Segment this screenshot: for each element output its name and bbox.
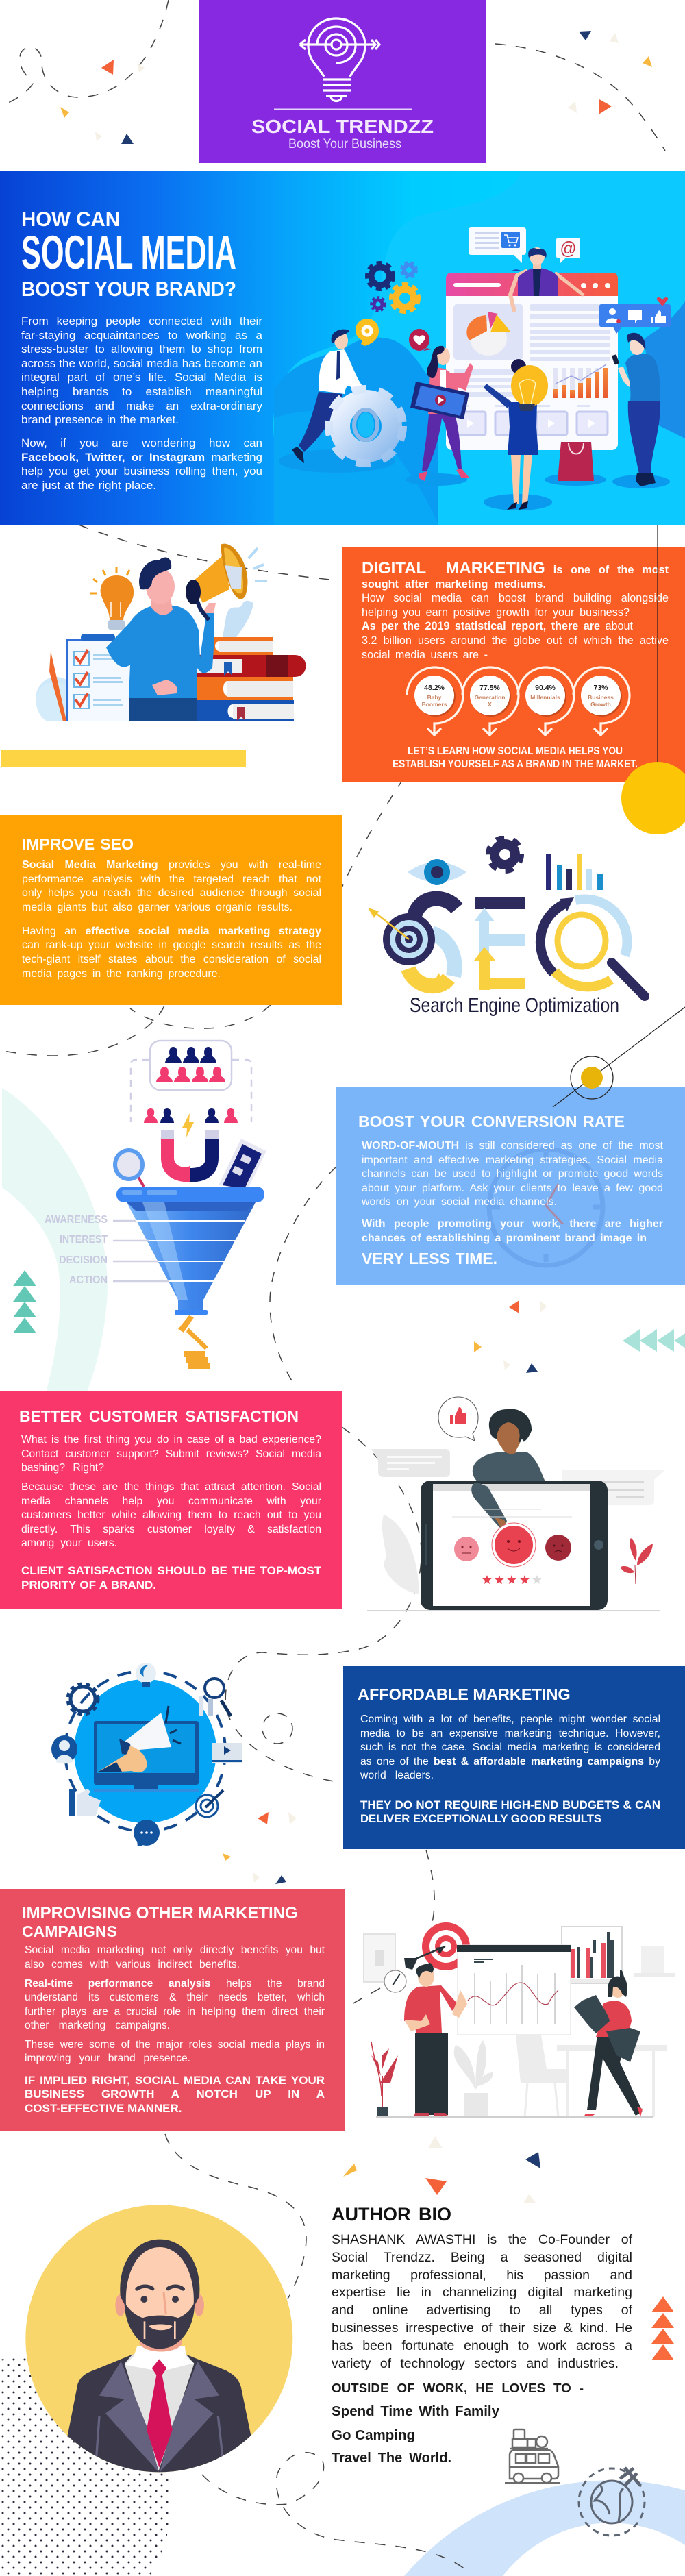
heading: how can social media boost your brand: BOOST YOUR BRAND?: [21, 278, 236, 301]
speech bubble: at sign: [556, 238, 580, 263]
heading: how can social media boost your brand: HOW CAN: [21, 208, 120, 231]
heading: how can social media boost your brand: [21, 208, 236, 301]
text block: affordable marketing body: DELIVER EXCEPTIONALLY GOOD RESULTS: [360, 1812, 601, 1825]
text block: digital marketing intro: As per the 2019 statistical report, there are about: [362, 620, 633, 632]
star rating: [482, 1573, 543, 1587]
icons: gears: [367, 262, 419, 312]
text block: author bio: [332, 2204, 633, 2466]
text block: seo body: Having an effective social media marketing strategy: [22, 926, 321, 937]
stat: business growth: 73%: [593, 684, 608, 692]
pale plant: [454, 2040, 493, 2116]
text block: author bio: and online advertising to all types of: [332, 2303, 632, 2318]
text block: word of mouth: VERY LESS TIME.: [362, 1250, 497, 1267]
panel: affordable marketing: [343, 1666, 685, 1849]
heading: how can social media boost your brand: SOCIAL MEDIA: [21, 226, 236, 279]
person: man on top of window: [510, 247, 584, 312]
star rating: ★: [494, 1573, 505, 1587]
panel: digital marketing: [342, 547, 685, 782]
funnel stage labels: ACTION: [69, 1274, 108, 1286]
icon: eye: [408, 859, 466, 885]
letter E: [474, 897, 525, 990]
funnel stage labels: DECISION: [59, 1254, 108, 1266]
person leaning on tablet: [473, 1409, 546, 1524]
text block: campaigns body: improving your brand presence.: [25, 2053, 190, 2064]
overlay: thin lines and accent circles: [552, 525, 685, 1107]
pale office furniture: [516, 1946, 675, 2117]
text block: word of mouth: important and effective marketing strategies. Social media: [362, 1154, 663, 1166]
text block: digital marketing intro: sought after marketing mediums.: [362, 578, 546, 591]
icon: gear: [488, 838, 521, 871]
text block: seo body: media giants but also garner various organic results.: [22, 902, 292, 913]
label: search engine optimization: Search Engine Optimization: [410, 994, 619, 1017]
illustration: SEO search engine optimization: [368, 836, 649, 1017]
star rating: ★: [482, 1573, 493, 1587]
text block: digital marketing intro: How social media can boost brand building alongside: [362, 592, 669, 604]
social reaction bubble: [599, 297, 671, 334]
heading: improvising other marketing campaigns: IMPROVISING OTHER MARKETING: [22, 1904, 298, 1922]
person: woman with tablet: [410, 346, 473, 481]
text block: hero introduction: connections and make an extra-ordinary: [21, 399, 262, 412]
icon: lightbulb: [136, 1663, 156, 1687]
funnel stage labels: AWARENESS: [45, 1214, 108, 1226]
illustration: team around a website: [279, 227, 671, 510]
attracted people: [144, 1108, 238, 1123]
text block: customer satisfaction body: Contact customer support? Submit reviews? Social media: [21, 1448, 321, 1459]
text block: seo body: Social Media Marketing provides you with real-time: [22, 859, 321, 871]
person: man with phone: [612, 333, 660, 486]
text block: author bio: businesses irrespective of their size & kind. He: [332, 2320, 632, 2336]
star rating: ★: [519, 1573, 530, 1587]
chart frame: [562, 1927, 622, 1983]
text block: hero introduction: [21, 314, 262, 492]
text block: digital marketing intro: social media users are -: [362, 649, 488, 661]
text block: hero introduction: across the world, social media has become an: [21, 357, 262, 370]
icon: lightbulb target logo: [300, 18, 379, 101]
stat: baby boomers: Baby: [427, 694, 442, 701]
text block: digital marketing intro: DIGITAL MARKETING is one of the most: [362, 559, 669, 578]
text block: affordable marketing body: such is not the case. Social media marketing is considered: [360, 1742, 660, 1753]
text block: affordable marketing body: THEY DO NOT REQUIRE HIGH-END BUDGETS & CAN: [360, 1798, 660, 1811]
illustration: digital marketing monitor hub: [51, 1663, 242, 1846]
brand name: SOCIAL TRENDZZ: [251, 116, 434, 137]
icon: thumbs up: [69, 1789, 101, 1816]
star rating: ★: [506, 1573, 517, 1587]
decorative yellow bar: [1, 750, 246, 767]
rating face: neutral: [454, 1537, 479, 1561]
text block: author bio: SHASHANK AWASTHI is the Co-Founder of: [332, 2232, 632, 2247]
accent: target circle: [571, 1056, 613, 1099]
watermark: clock: [486, 1147, 606, 1267]
text block: author bio: Social Trendzz. Being a seasoned digital: [332, 2250, 632, 2265]
text block: affordable marketing body: media to be an expensive marketing technique. However,: [360, 1728, 660, 1739]
text block: affordable marketing body: Coming with a lot of benefits, people might wonder social: [360, 1713, 660, 1725]
illustration: author portrait: [25, 2205, 293, 2472]
text block: hero introduction: brand presence in the market.: [21, 413, 179, 426]
icon: globe with plane: [578, 2466, 645, 2536]
icon: pale leaf: [382, 1515, 419, 1594]
books stack: [192, 637, 306, 721]
heading: author bio: AUTHOR BIO: [332, 2204, 451, 2225]
bubble: gray right: [562, 1470, 664, 1505]
text block: digital marketing intro: [362, 559, 669, 661]
icon: camper van: [505, 2428, 560, 2484]
stat: baby boomers: [414, 676, 456, 717]
stat: generation x: 77.5%: [480, 684, 501, 692]
text block: campaigns body: other marketing campaigns.: [25, 2020, 170, 2031]
text block: author bio: variety of technology sectors and industries.: [332, 2356, 619, 2371]
tagline: Boost Your Business: [288, 137, 401, 151]
text block: campaigns body: COST-EFFECTIVE MANNER.: [25, 2102, 182, 2115]
text block: campaigns body: also comes with various indirect benefits.: [25, 1959, 240, 1970]
panel: better customer satisfaction: [0, 1391, 342, 1609]
text block: word of mouth: With people promoting your work, there are higher: [362, 1218, 663, 1230]
text block: digital marketing intro: helping you earn positive growth for your business?: [362, 606, 630, 619]
heading: boost your conversion rate: BOOST YOUR CONVERSION RATE: [358, 1113, 625, 1130]
heading: improvising other marketing campaigns: [22, 1904, 298, 1940]
text block: customer satisfaction body: What is the first thing you do in case of a bad experience?: [21, 1434, 321, 1446]
text block: hero introduction: help you get your business rolling then, you: [21, 465, 262, 478]
text block: customer satisfaction body: PRIORITY OF A BRAND.: [21, 1578, 156, 1591]
heading: affordable marketing: AFFORDABLE MARKETING: [358, 1685, 571, 1703]
funnel: [116, 1187, 264, 1315]
text block: hero introduction: integral part of one’s life. Social Media is: [21, 371, 262, 384]
text block: seo body: can rank-up your website in google search results as the: [22, 939, 321, 951]
person: presenter: [404, 1963, 467, 2117]
pale frame left: [364, 1934, 395, 1982]
text block: digital marketing intro: 3.2 billion users around the globe out of which the active: [362, 634, 669, 647]
text block: campaigns body: These were some of the major roles social media plays in: [25, 2039, 325, 2051]
bar chart: [553, 364, 608, 398]
text block: author bio: OUTSIDE OF WORK, HE LOVES TO -: [332, 2381, 584, 2395]
illustration: presenter with target and chart: [363, 1922, 675, 2118]
statistics rings: [406, 666, 631, 737]
icon: magnifier: [199, 1679, 231, 1716]
text block: seo body: media pages in the ranking procedure.: [22, 968, 221, 980]
speech bubble: cart: [469, 227, 526, 263]
icon: shopping bag: [558, 442, 594, 481]
heading: better customer satisfaction: BETTER CUSTOMER SATISFACTION: [19, 1407, 299, 1425]
person: woman holding dog: [574, 1970, 643, 2117]
person: [106, 558, 216, 721]
text block: seo body: tech-giant itself states about the consideration of social: [22, 954, 321, 965]
stat: baby boomers: Boomers: [422, 701, 447, 708]
text block: customer satisfaction body: directly. This sparks customer loyalty & satisfaction: [21, 1524, 321, 1535]
text block: campaigns body: IF IMPLIED RIGHT, SOCIAL MEDIA CAN TAKE YOUR: [25, 2074, 325, 2087]
icon: magnet: [161, 1130, 219, 1182]
text block: campaigns body: [25, 1944, 325, 2115]
stat: business growth: Growth: [590, 701, 611, 708]
rating face: happy: [492, 1523, 536, 1567]
text block: customer satisfaction body: CLIENT SATISFACTION SHOULD BE THE TOP-MOST: [21, 1564, 321, 1577]
text block: author bio: has been fortunate enough to work across a: [332, 2338, 632, 2353]
icon: chat bubble: [134, 1820, 160, 1847]
text block: word of mouth: channels can be used to highlight or promote good words: [362, 1168, 663, 1180]
text block: hero introduction: stress-buster to allowing them to shop from: [21, 343, 262, 356]
icon: magnifier: [115, 1150, 144, 1187]
stat: generation x: X: [488, 701, 492, 708]
text block: hero introduction: Facebook, Twitter, or Instagram marketing: [21, 451, 262, 464]
text block: affordable marketing body: as one of the best & affordable marketing campaigns by: [360, 1755, 660, 1768]
bubble: heart: [409, 329, 432, 351]
text block: hero introduction: far-staying acquaintances to working as a: [21, 329, 262, 342]
tablet with rating faces: [421, 1481, 608, 1610]
accent: yellow circle: [621, 762, 685, 834]
text block: author bio: expertise lie in channelizing digital marketing: [332, 2285, 632, 2300]
panel: improvising other marketing campaigns: [0, 1889, 345, 2131]
funnel stage labels: INTEREST: [60, 1234, 108, 1246]
website window: [446, 273, 618, 450]
person: woman with lightbulb: [484, 359, 548, 510]
funnel stage labels: [45, 1214, 169, 1286]
icon: megaphone: [186, 544, 267, 620]
icon: red plant: [621, 1538, 653, 1584]
illustration: marketing funnel with magnet: [45, 1040, 266, 1369]
callout: learn how social media helps: [393, 745, 638, 770]
text block: campaigns body: Social media marketing not only directly benefits you but: [25, 1944, 325, 1956]
bubble: thumbs up: [438, 1397, 478, 1441]
text block: word of mouth: about your platform. Ask your clients to leave a few good: [362, 1182, 663, 1194]
text block: hero introduction: Now, if you are wondering how can: [21, 436, 262, 449]
text block: customer satisfaction body: customers better while allowing them to reach out to you: [21, 1509, 321, 1521]
text block: customer satisfaction body: media channels help you communicate with your: [21, 1495, 321, 1507]
logo panel: Social Trendzz: [199, 0, 486, 163]
text block: affordable marketing body: [360, 1713, 660, 1825]
icon: leaves: [223, 601, 253, 637]
bubble: orange gear: [356, 319, 379, 346]
monitor with megaphone: [94, 1706, 199, 1792]
text block: seo body: [22, 859, 321, 980]
speech bubble: at sign: @: [560, 238, 577, 258]
stat: baby boomers: 48.2%: [424, 684, 445, 692]
callout: learn how social media helps: LET’S LEARN HOW SOCIAL MEDIA HELPS YOU: [408, 745, 623, 757]
text block: word of mouth: [362, 1140, 663, 1267]
text block: author bio: Spend Time With Family: [332, 2403, 499, 2419]
icon: target: [196, 1790, 223, 1817]
coins falling: [178, 1315, 210, 1369]
icon: lightbulb: [90, 567, 134, 630]
text block: campaigns body: understand its customers & their needs better, which: [25, 1992, 325, 2003]
panel: improve seo: [0, 815, 342, 1005]
text block: seo body: performance analysis with the targeted reach that not: [22, 874, 321, 885]
letter Q magnifier: [540, 900, 645, 996]
text block: seo body: only helps you reach the desired audience through social: [22, 887, 321, 899]
audience box: [131, 1041, 251, 1122]
text block: campaigns body: Real-time performance analysis helps the brand: [25, 1978, 325, 1990]
icon: phone: [219, 1139, 266, 1189]
stat: millennials: [525, 676, 566, 717]
icon: red plant and pot: [371, 2042, 398, 2117]
panel: boost your conversion rate: [336, 1087, 685, 1285]
text block: author bio: marketing professional, his passion and: [332, 2268, 632, 2283]
bubble: arrow: [384, 1970, 406, 1992]
icon: lightning bolt: [182, 1113, 194, 1137]
letter S: [408, 899, 457, 986]
text block: hero introduction: From keeping people connected with their: [21, 314, 262, 327]
panel: hero how can social media boost your brand: [0, 171, 685, 525]
stat: millennials: 90.4%: [535, 684, 556, 692]
text block: customer satisfaction body: among your users.: [21, 1537, 117, 1549]
illustration: customer review on tablet: [367, 1396, 664, 1611]
icon: bar chart: [546, 854, 603, 890]
text block: author bio: Go Camping: [332, 2427, 415, 2443]
text block: hero introduction: helping brands to establish meaningful: [21, 385, 262, 398]
icon: gear with dollar: [68, 1684, 98, 1714]
text block: campaigns body: further plays are a crucial role in helping them direct their: [25, 2006, 325, 2018]
icon: user: [51, 1735, 77, 1763]
star rating: ★: [532, 1573, 543, 1587]
bubble: gray left: [371, 1449, 450, 1477]
rating face: sad: [545, 1535, 571, 1561]
icon: target with arrow: [368, 908, 435, 965]
stat: generation x: Generation: [475, 694, 505, 701]
stat: millennials: Millennials: [530, 694, 560, 701]
presentation board: [457, 1945, 571, 2035]
illustration: man with megaphone and books: [36, 544, 306, 721]
text block: campaigns body: BUSINESS GROWTH A NOTCH UP IN A: [25, 2088, 325, 2101]
heading: improve seo: IMPROVE SEO: [22, 835, 134, 853]
text block: hero introduction: are just at the right place.: [21, 479, 156, 492]
text block: affordable marketing body: world leaders.: [360, 1770, 434, 1781]
stat: business growth: [581, 676, 622, 717]
heading: improvising other marketing campaigns: CAMPAIGNS: [22, 1922, 117, 1940]
text block: word of mouth: WORD-OF-MOUTH is still considered as one of the most: [362, 1140, 663, 1152]
text block: word of mouth: words on your social media channels.: [362, 1196, 557, 1208]
stat: generation x: [470, 676, 511, 717]
person: man with large gear: [292, 330, 403, 463]
stat: business growth: Business: [588, 694, 614, 701]
text block: author bio: Travel The World.: [332, 2451, 451, 2466]
text block: word of mouth: chances of establishing a prominent brand image in: [362, 1233, 647, 1244]
icon: target with arrow: [404, 1922, 470, 1970]
icon: big gear: [329, 389, 403, 463]
icon: video player: [212, 1743, 242, 1763]
text block: customer satisfaction body: bashing? Right?: [21, 1462, 104, 1474]
text block: customer satisfaction body: [21, 1434, 322, 1591]
text block: customer satisfaction body: Because these are the things that attract attention. Social: [21, 1481, 321, 1493]
